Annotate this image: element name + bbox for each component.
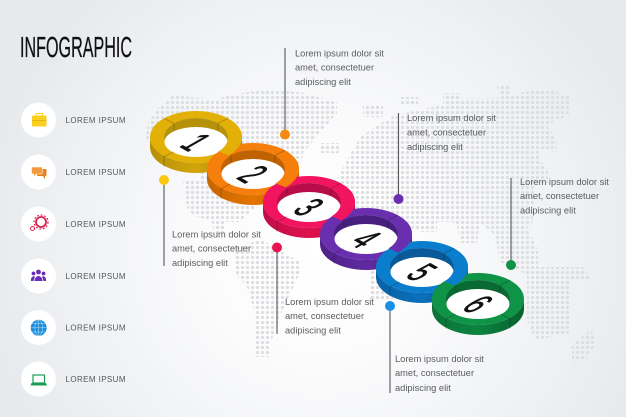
ring 3 (263, 176, 355, 238)
callout 3: adipiscing elit (520, 206, 576, 216)
sidebar item 3: gears (21, 206, 126, 242)
sidebar item 5: globe: LOREM IPSUM (66, 323, 126, 332)
sidebar item 6: laptop (21, 362, 126, 396)
callout 2: adipiscing elit (407, 142, 463, 152)
callout 2: Lorem ipsum dolor sit (407, 113, 496, 123)
callout 6: amet, consectetuer (395, 368, 474, 378)
sidebar item 4: people: LOREM IPSUM (66, 272, 126, 281)
sidebar item 4: people (21, 258, 126, 294)
callout 4: Lorem ipsum dolor sit (172, 230, 261, 240)
sidebar item 1: briefcase (21, 102, 126, 138)
callout 6 (385, 301, 484, 393)
ring 5 link over ring 6 (444, 255, 468, 286)
icon: people group (31, 270, 46, 281)
callout 6: Lorem ipsum dolor sit (395, 354, 484, 364)
callout 2 (394, 113, 496, 204)
dotted world map (140, 80, 600, 365)
ring 4 link over ring 5 (388, 222, 412, 252)
callout 5: Lorem ipsum dolor sit (285, 297, 374, 307)
ring 2 link over ring 3 (276, 157, 299, 188)
title: INFOGRAPHIC (20, 32, 132, 64)
ring 3 link over ring 4 (332, 190, 355, 220)
callout 1: amet, consectetuer (295, 62, 374, 72)
sidebar item 2: chat: LOREM IPSUM (66, 168, 126, 177)
ring 2: 2 (228, 160, 277, 188)
callout 3: amet, consectetuer (520, 191, 599, 201)
callout 1: adipiscing elit (295, 77, 351, 87)
callout 2: amet, consectetuer (407, 128, 486, 138)
icon: chat bubbles (32, 167, 46, 179)
ring 6: 6 (453, 290, 502, 318)
ring 3: 3 (284, 193, 333, 221)
ring 1 (150, 111, 242, 173)
callout 1: Lorem ipsum dolor sit (295, 48, 384, 58)
ring 4: 4 (341, 225, 390, 253)
sidebar item 5: globe (21, 310, 126, 345)
ring 5: 5 (397, 258, 446, 286)
icon: gears (30, 215, 48, 230)
callout 6: adipiscing elit (395, 383, 451, 393)
icon: laptop (30, 375, 47, 386)
callout 5: adipiscing elit (285, 326, 341, 336)
ring 1 link over ring 2 (218, 125, 242, 156)
callout 5: amet, consectetuer (285, 311, 364, 321)
callout 4: adipiscing elit (172, 258, 228, 268)
callout 3: Lorem ipsum dolor sit (520, 177, 609, 187)
sidebar item 1: briefcase: LOREM IPSUM (66, 116, 126, 125)
icon: briefcase (32, 114, 46, 126)
ring 2 (207, 143, 299, 205)
sidebar item 3: gears: LOREM IPSUM (66, 220, 126, 229)
ring 5 (376, 241, 468, 303)
ring 6 (432, 273, 524, 335)
icon: globe (31, 320, 47, 336)
callout 4: amet, consectetuer (172, 244, 251, 254)
sidebar item 6: laptop: LOREM IPSUM (66, 375, 126, 384)
callout 3 (506, 177, 609, 270)
callout 5 (272, 242, 374, 336)
ring 4 (320, 208, 412, 270)
callout 4 (159, 175, 261, 268)
ring 1: 1 (171, 128, 220, 156)
sidebar item 2: chat (21, 154, 126, 190)
callout 1 (280, 48, 384, 140)
